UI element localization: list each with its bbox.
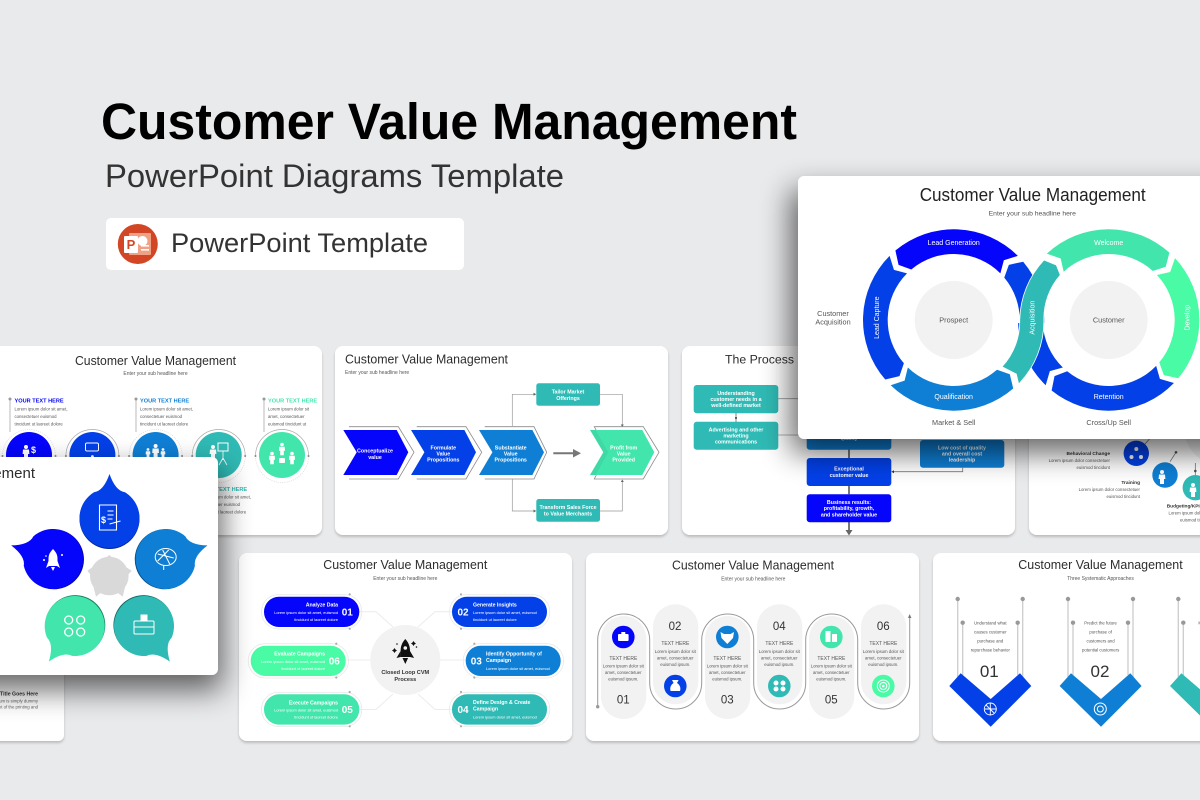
panel: card 3 process flow — [682, 346, 1015, 536]
icon: hands — [65, 616, 85, 636]
chevron: Conceptualize value: Conceptualize — [357, 448, 393, 454]
box: Advertising: Advertising and other — [709, 427, 763, 433]
step 05: Lorem ipsum dolor sit — [811, 664, 853, 668]
card 7 sub headline: Enter your sub headline here — [721, 576, 786, 582]
petal: top — [80, 474, 140, 549]
connectors — [735, 399, 963, 536]
item columns text: consectetuer euismod — [140, 414, 183, 419]
item columns text: Lorem ipsum dolor sit amet, — [140, 406, 193, 412]
approach 02: 02 — [1091, 662, 1109, 681]
box: Advertising: marketing — [723, 434, 749, 440]
card 7 heading: Customer Value Management — [672, 558, 834, 572]
chevron: Substantiate Value Propositions: Propositions — [495, 458, 527, 464]
item: Training: Training — [1121, 480, 1140, 486]
petal: bottom left — [25, 583, 117, 679]
badge label: PowerPoint Template — [171, 228, 428, 258]
item: Budgeting/KPI: Budgeting/KPI — [1167, 504, 1200, 510]
card 2 sub headline: Enter your sub headline here — [345, 370, 409, 376]
pill 01 Analyze Data: 01 — [342, 608, 353, 618]
pill 01 Analyze Data: Lorem ipsum dolor sit amet, euismod — [274, 610, 338, 615]
main title: Customer Value Management — [101, 93, 797, 150]
segment: Welcome — [1047, 229, 1169, 272]
item columns text: YOUR TEXT HERE — [140, 398, 189, 404]
label: Market & Sell: Market & Sell — [932, 418, 976, 427]
step 06: 06 — [877, 621, 890, 633]
grey pills — [601, 604, 906, 719]
center circle with rocket: Closed Loop CVM — [381, 670, 430, 676]
box: Low cost: Low cost of quality — [938, 445, 986, 451]
box: Exceptional customer value: customer value — [830, 473, 868, 479]
item: Behavioral Change — [1049, 441, 1149, 470]
approach 02 — [1060, 597, 1142, 727]
pill 06 Evaluate Campaigns: Evaluate Campaigns — [274, 652, 325, 658]
step 04: Lorem ipsum dolor sit — [759, 649, 801, 654]
pill 02 Generate Insights: 02 — [457, 608, 469, 618]
step 05 — [811, 626, 853, 706]
petal: bottom right — [102, 583, 194, 679]
pill 06 Evaluate Campaigns — [248, 643, 348, 679]
step 05: amet, consectetuer — [813, 670, 850, 675]
step 03: Lorem ipsum dolor sit — [707, 664, 749, 668]
chevron: Conceptualize value: value — [368, 455, 382, 461]
segment: Lead Generation: Lead Generation — [928, 240, 980, 247]
chevron: Profit from Value Provided: Profit from — [610, 445, 638, 451]
item: Behavioral Change: Behavioral Change — [1067, 451, 1110, 457]
step 01: amet, consectetuer — [605, 670, 642, 675]
segment: Lead Capture: Lead Capture — [874, 296, 881, 339]
approach 01: repurchase behavior — [971, 648, 1010, 652]
box: quality — [807, 415, 891, 450]
box: Transform Sales Force: Transform Sales Force — [539, 505, 597, 511]
arcs around circles — [2, 430, 310, 483]
card 1 sub headline: Enter your sub headline here — [123, 371, 188, 377]
pill 05 Execute Campaigns: Lorem ipsum dolor sit amet, euismod — [274, 708, 338, 712]
pill 03 Identify Opportunity: Lorem ipsum dolor sit amet, euismod — [486, 666, 550, 671]
pill 01 Analyze Data — [262, 593, 362, 630]
step 04: 04 — [773, 621, 786, 633]
overlay right heading: Customer Value Management — [920, 185, 1146, 205]
box: Exceptional customer value — [807, 458, 891, 486]
step 05: TEXT HERE — [817, 656, 846, 662]
step 01: TEXT HERE — [609, 656, 638, 662]
chevron: Profit from Value Provided: Provided — [612, 458, 635, 464]
item columns text: tincidunt ut laoreet dolore — [198, 510, 247, 514]
item columns text: consectetuer euismod — [14, 414, 57, 419]
pill 05 Execute Campaigns — [262, 691, 362, 727]
chevron: Formulate Value Propositions: Propositions — [427, 458, 460, 464]
icon: invoice: $ — [101, 515, 106, 525]
box: Low cost — [920, 440, 1004, 468]
panel: card 8 three approaches — [933, 553, 1200, 741]
centre: Prospect: Prospect — [939, 316, 968, 324]
item: Training: euismod tincidunt — [1107, 494, 1141, 499]
center pentagon — [87, 555, 132, 597]
segment: Develop — [1157, 258, 1199, 378]
pill 05 Execute Campaigns: tincidunt ut laoreet dolore — [294, 714, 338, 720]
approach 03 — [1170, 597, 1200, 727]
pill 04 Define Design: 04 — [457, 705, 469, 716]
item: Behavioral Change: euismod tincidunt — [1077, 465, 1111, 470]
card 3 heading: The Process of Customer Value — [725, 352, 899, 366]
center circle with rocket: Process — [394, 677, 416, 683]
segment: Qualification: Qualification — [934, 394, 973, 401]
segment: Lead Generation — [895, 229, 1018, 273]
panel: card 4 radial items — [1029, 346, 1200, 535]
icon: PowerPoint logo: P — [127, 237, 136, 252]
card 6 heading: Customer Value Management — [323, 557, 488, 572]
pill 06 Evaluate Campaigns: 06 — [329, 656, 340, 668]
pill 05 Execute Campaigns: Execute Campaigns — [289, 700, 338, 706]
box: Advertising: communications — [715, 440, 757, 446]
icon: rocket — [392, 639, 417, 664]
segment: Acquisition: Acquisition — [1030, 301, 1036, 335]
item: Budgeting/KPI — [1167, 475, 1200, 522]
item columns text: amet, consectetuer — [268, 414, 305, 419]
segment: Retention — [1052, 366, 1174, 411]
step 04: euismod ipsum. — [764, 662, 794, 667]
pill 02 Generate Insights — [450, 593, 550, 630]
connector lines — [346, 612, 466, 710]
pill 03 Identify Opportunity — [463, 643, 564, 679]
item circles with icons: $ — [31, 445, 36, 455]
box: Understanding customer needs: customer needs in a — [710, 397, 762, 403]
pill 03 Identify Opportunity: Campaign — [486, 658, 511, 664]
box: Understanding customer needs — [694, 385, 778, 413]
segment: hidden lower blue — [1018, 322, 1063, 385]
step 02: TEXT HERE — [661, 641, 690, 647]
box: Transform Sales Force: to Value Merchants — [544, 512, 592, 518]
item: Training: Lorem ipsum dolor consectetuer — [1079, 487, 1141, 492]
pill 04 Define Design: Campaign — [473, 706, 498, 712]
subtitle: PowerPoint Diagrams Template — [105, 158, 564, 194]
panel: left overlay slide with petals — [0, 457, 222, 690]
label: Customer Acquisition: Acquisition — [815, 318, 851, 326]
segment: Retention: Retention — [1094, 394, 1124, 401]
chevron outlines — [349, 427, 659, 479]
step 06: Lorem ipsum dolor sit — [863, 649, 905, 654]
item columns text: YOUR TEXT HERE — [198, 487, 247, 493]
step 06: amet, consectetuer — [865, 656, 902, 660]
segment: Acquisition — [1002, 260, 1060, 384]
icon: PowerPoint logo — [118, 224, 158, 264]
petal: right — [127, 517, 217, 597]
item: Training — [1079, 462, 1178, 499]
step 03: amet, consectetuer — [709, 670, 746, 675]
chevron: Profit from Value Provided: Value — [617, 452, 631, 458]
pill 02 Generate Insights: Lorem ipsum dolor sit amet, euismod — [473, 610, 537, 615]
centre: Prospect — [915, 281, 993, 359]
item: Behavioral Change: Lorem ipsum dolor consectetuer — [1049, 458, 1111, 463]
step 03: TEXT HERE — [713, 656, 742, 662]
step 02: Lorem ipsum dolor sit — [655, 649, 697, 654]
connectors — [1145, 436, 1196, 475]
chevron: Formulate Value Propositions — [411, 430, 476, 475]
item columns text: Lorem ipsum dolor sit — [268, 406, 310, 412]
panel: card 2 chevron process — [335, 346, 668, 535]
chevron: Conceptualize value — [343, 430, 408, 475]
centre: Customer: Customer — [1093, 316, 1125, 324]
approach 02: customers and — [1087, 638, 1115, 644]
pill 04 Define Design: Define Design & Create — [473, 700, 530, 706]
petal: left — [2, 517, 92, 597]
box: Business results: profitability, growth, — [824, 506, 875, 512]
icon: target — [1094, 703, 1106, 715]
item columns text: YOUR TEXT HERE — [14, 398, 64, 404]
chevron: Profit from Value Provided — [590, 430, 654, 475]
step 01: euismod ipsum. — [608, 677, 638, 682]
chevron: Substantiate Value Propositions: Value — [504, 452, 518, 458]
step 01: 01 — [617, 694, 630, 706]
centre: Customer — [1070, 281, 1148, 359]
pill 06 Evaluate Campaigns: Lorem ipsum dolor sit amet, euismod — [261, 659, 325, 664]
arrow: to profit — [553, 449, 581, 458]
step 03 — [707, 626, 749, 706]
item columns text: euismod tincidunt ut — [268, 422, 307, 426]
step 02: 02 — [669, 621, 681, 633]
card 2 heading: Customer Value Management — [345, 352, 508, 366]
icon: briefcase — [134, 615, 154, 634]
box: Exceptional customer value: Exceptional — [834, 466, 864, 472]
box: Understanding customer needs: Understanding — [717, 391, 755, 397]
step 05: euismod ipsum. — [816, 677, 846, 682]
pill 04 Define Design: Lorem ipsum dolor sit amet, euismod — [473, 714, 537, 720]
connectors — [512, 393, 624, 512]
box: Business results: Business results: — [827, 500, 871, 506]
card 6 sub headline: Enter your sub headline here — [373, 576, 438, 582]
approach 02: Predict the future — [1084, 620, 1118, 626]
approach 01: Understand what — [974, 620, 1007, 626]
box: quality: quality — [840, 436, 858, 442]
pill 04 Define Design — [450, 691, 550, 727]
pill 02 Generate Insights: tincidunt ut laoreet dolore — [473, 617, 517, 622]
item columns text: YOUR TEXT HERE — [268, 398, 317, 404]
approach 02: purchase of — [1089, 630, 1113, 634]
step 01 — [603, 626, 645, 706]
step 04: amet, consectetuer — [761, 656, 798, 660]
pill 02 Generate Insights: Generate Insights — [473, 603, 517, 609]
segment: hidden upper blue — [1004, 262, 1044, 323]
box: Business results: and shareholder value — [821, 512, 877, 518]
badge: PowerPoint Template — [106, 218, 464, 270]
panel: card 6 closed loop process — [239, 553, 572, 741]
step 06: euismod ipsum. — [868, 662, 898, 667]
pill 06 Evaluate Campaigns: tincidunt ut laoreet dolore — [281, 666, 325, 671]
step 02: amet, consectetuer — [657, 656, 694, 660]
item columns text: Lorem ipsum dolor sit amet, — [14, 406, 68, 412]
card 1 heading: Customer Value Management — [75, 353, 236, 368]
approach 01: causes customer — [974, 630, 1007, 634]
approach 01 — [949, 597, 1031, 727]
label: Customer Acquisition: Customer — [817, 309, 849, 318]
center circle with rocket — [370, 625, 440, 695]
box: Understanding customer needs: well-defined market — [710, 403, 761, 409]
pill 03 Identify Opportunity: Identify Opportunity of — [486, 652, 542, 658]
card 8 heading: Customer Value Management — [1018, 557, 1183, 572]
chevron: Formulate Value Propositions: Value — [436, 452, 450, 458]
step 03: 03 — [721, 694, 734, 706]
segment: Welcome: Welcome — [1094, 240, 1123, 247]
large grey circle — [1183, 383, 1200, 467]
icon: rocket — [43, 549, 63, 571]
item columns text — [8, 398, 317, 514]
panel: right overlay slide with rings — [791, 176, 1200, 453]
box: Tailor Market Offerings — [536, 383, 600, 406]
step 01: Lorem ipsum dolor sit — [603, 664, 645, 668]
icon: brain network — [155, 548, 176, 570]
approach 01: purchase and — [977, 638, 1004, 644]
box: Tailor Market Offerings: Offerings — [556, 396, 580, 402]
approach 02: potential customers — [1082, 648, 1119, 652]
segment: Develop: Develop — [1184, 305, 1192, 331]
chevron: Formulate Value Propositions: Formulate — [430, 445, 456, 451]
item circles with icons — [6, 432, 305, 478]
step 02: euismod ipsum. — [660, 662, 690, 667]
pill 01 Analyze Data: Analyze Data — [306, 603, 338, 609]
step 06 — [863, 621, 905, 697]
step 04: TEXT HERE — [765, 641, 794, 647]
box: Business results — [807, 494, 891, 522]
pill 01 Analyze Data: tincidunt ut laoreet dolore — [294, 617, 338, 622]
icon: brain — [984, 703, 996, 715]
chevron: Substantiate Value Propositions: Substantiate — [495, 445, 527, 451]
label: Cross/Up Sell: Cross/Up Sell — [1086, 418, 1131, 427]
chevron: Substantiate Value Propositions — [479, 430, 544, 475]
approach 01: 01 — [980, 662, 999, 681]
item columns text: tincidunt ut laoreet dolore — [14, 422, 63, 426]
card 8 sub headline: Three Systematic Approaches — [1067, 576, 1134, 582]
segment: Qualification — [891, 367, 1013, 411]
step 03: euismod ipsum. — [712, 677, 742, 682]
box: Advertising — [694, 422, 778, 450]
item columns text: tincidunt ut laoreet dolore — [140, 422, 189, 426]
overlay right sub headline: Enter your sub headline here — [989, 210, 1076, 218]
box: Transform Sales Force — [536, 499, 600, 522]
step 02 — [655, 621, 697, 697]
pill 03 Identify Opportunity: 03 — [471, 656, 482, 668]
pill 05 Execute Campaigns: 05 — [342, 705, 353, 716]
panel: card 1 five circles — [0, 346, 322, 535]
step 06: TEXT HERE — [869, 641, 898, 647]
box: Low cost: and overall cost — [942, 452, 982, 458]
step 04 — [759, 621, 801, 697]
box: Tailor Market Offerings: Tailor Market — [552, 390, 585, 396]
item columns text: consectetuer euismod — [198, 502, 241, 507]
step 05: 05 — [825, 694, 838, 706]
item columns text: Lorem ipsum dolor sit amet, — [198, 494, 251, 500]
panel: card 7 six step ribbon — [586, 553, 919, 741]
box: Low cost: leadership — [949, 458, 976, 464]
segment: Lead Capture — [863, 256, 907, 380]
panel: card 5 partial — [0, 553, 64, 741]
ribbon line with arrow — [596, 614, 911, 709]
